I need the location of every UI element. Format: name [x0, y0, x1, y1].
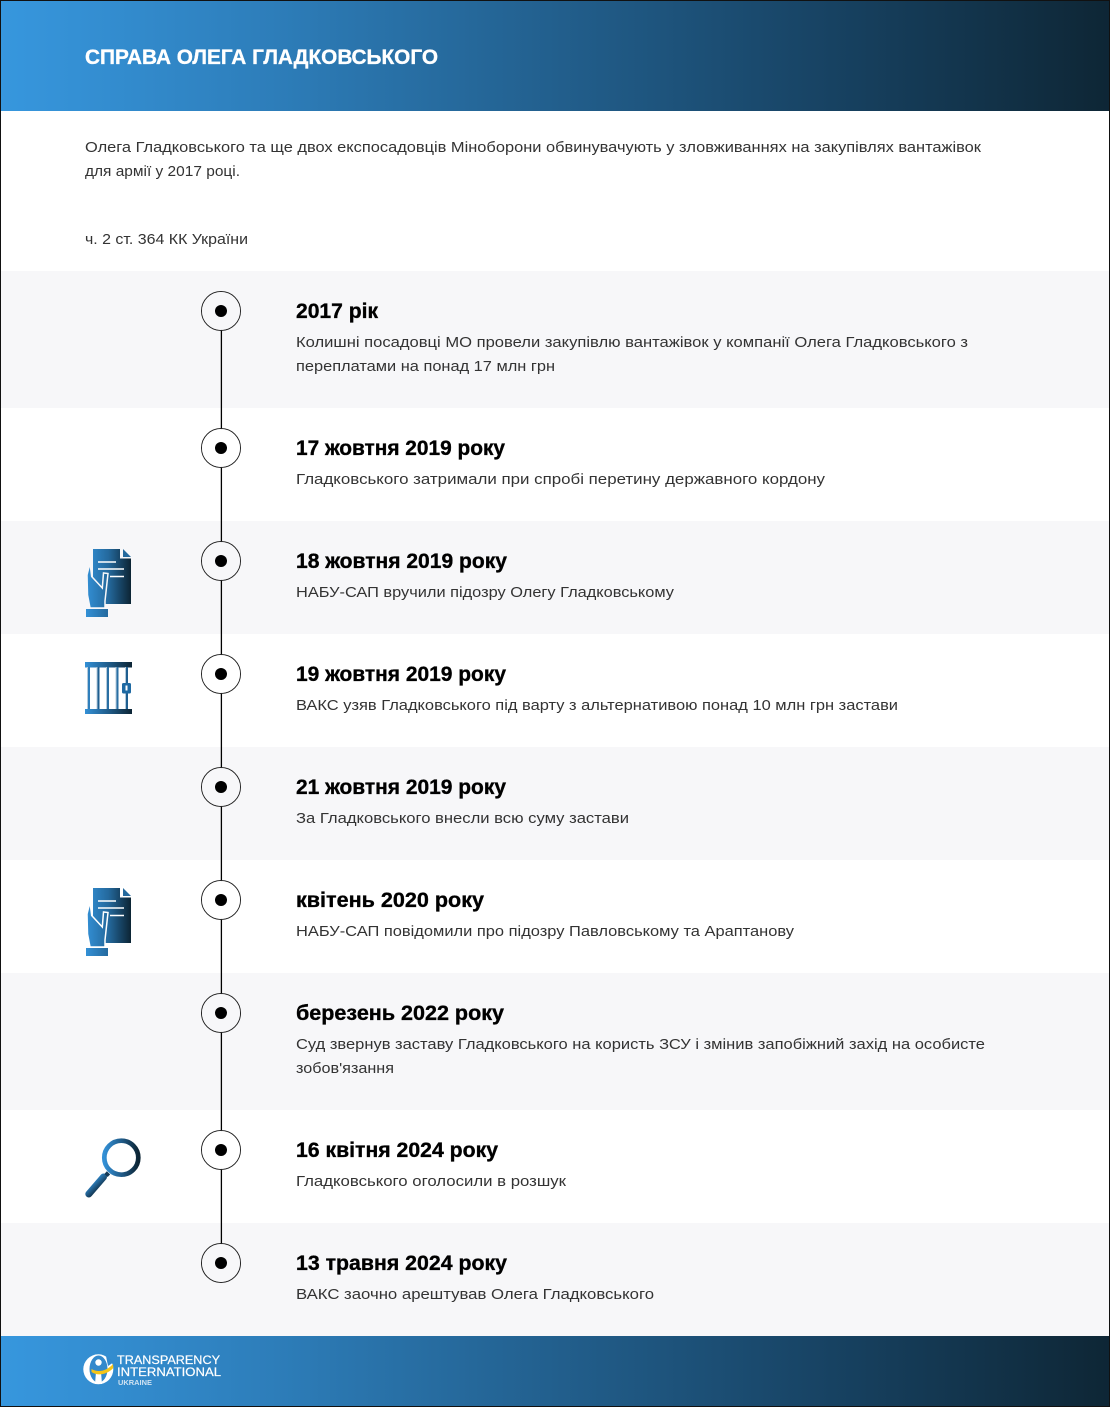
timeline axis: [220, 311, 222, 1263]
timeline row: 17 October 2019: Гладковського затримали при спробі перетину державного кордону: [296, 471, 826, 488]
timeline row: 16 April 2024: [0, 1110, 1110, 1223]
timeline row: 13 May 2024: 13 травня 2024 року: [296, 1252, 507, 1275]
timeline row: 18 October 2019: [0, 521, 1110, 634]
header banner: [0, 0, 1110, 111]
timeline row: 18 October 2019: 18 жовтня 2019 року: [296, 550, 507, 573]
timeline row: 19 October 2019: ВАКС узяв Гладковського під варту з альтернативою понад 10 млн грн застави: [296, 697, 898, 714]
timeline row: 13 May 2024: [0, 1223, 1110, 1336]
timeline row: 16 April 2024: Гладковського оголосили в розшук: [296, 1173, 566, 1190]
intro text: Олега Гладковського та ще двох експосадовців Міноборони обвинувачують у зловживаннях на закупівлях вантажівок: [85, 139, 981, 156]
timeline row: 16 April 2024: 16 квітня 2024 року: [296, 1139, 498, 1162]
timeline row: April 2020: квітень 2020 року: [296, 889, 484, 912]
timeline row: 18 October 2019: НАБУ-САП вручили підозру Олегу Гладковському: [296, 584, 675, 601]
legal article reference: ч. 2 ст. 364 КК України: [85, 231, 248, 248]
timeline row: 19 October 2019: [0, 634, 1110, 747]
timeline row: April 2020: [0, 860, 1110, 973]
timeline row: 13 May 2024: ВАКС заочно арештував Олега Гладковського: [296, 1286, 654, 1303]
timeline row: 2017: Колишні посадовці МО провели закупівлю вантажівок у компанії Олега Гладковського з: [296, 334, 968, 351]
timeline row: 19 October 2019: 19 жовтня 2019 року: [296, 663, 506, 686]
logo: Transparency International Ukraine: [83, 1353, 221, 1387]
timeline row: April 2020: НАБУ-САП повідомили про підозру Павловському та Араптанову: [296, 923, 795, 940]
timeline row: 21 October 2019: За Гладковського внесли всю суму застави: [296, 810, 629, 827]
logo: Transparency International Ukraine: UKRAINE: [118, 1380, 152, 1387]
timeline row: March 2022: березень 2022 року: [296, 1002, 504, 1025]
timeline row: 21 October 2019: [0, 747, 1110, 860]
timeline row: March 2022: зобов'язання: [296, 1060, 394, 1077]
intro text: для армії у 2017 році.: [85, 163, 240, 180]
intro text: [85, 139, 981, 180]
timeline row: March 2022: Суд звернув заставу Гладковського на користь ЗСУ і змінив запобіжний захід на особисте: [296, 1036, 985, 1053]
footer banner: [0, 1336, 1110, 1407]
timeline row: 21 October 2019: 21 жовтня 2019 року: [296, 776, 506, 799]
timeline row: 2017: переплатами на понад 17 млн грн: [296, 358, 555, 375]
timeline row: March 2022: [0, 973, 1110, 1110]
timeline row: 17 October 2019: [0, 408, 1110, 521]
title: СПРАВА ОЛЕГА ГЛАДКОВСЬКОГО: [85, 45, 438, 69]
logo: Transparency International Ukraine: INTERNATIONAL: [117, 1365, 221, 1379]
icon: hand holding document: [86, 549, 131, 617]
timeline markers: [202, 292, 240, 1282]
timeline row: 2017: 2017 рік: [296, 300, 378, 323]
icon: hand holding document: [86, 888, 131, 956]
icon: magnifying glass: [89, 1141, 138, 1194]
timeline row: 2017: [0, 271, 1110, 408]
timeline row: 17 October 2019: 17 жовтня 2019 року: [296, 437, 505, 460]
logo: Transparency International Ukraine: TRANSPARENCY: [117, 1353, 220, 1367]
icon: prison bars: [85, 662, 132, 714]
